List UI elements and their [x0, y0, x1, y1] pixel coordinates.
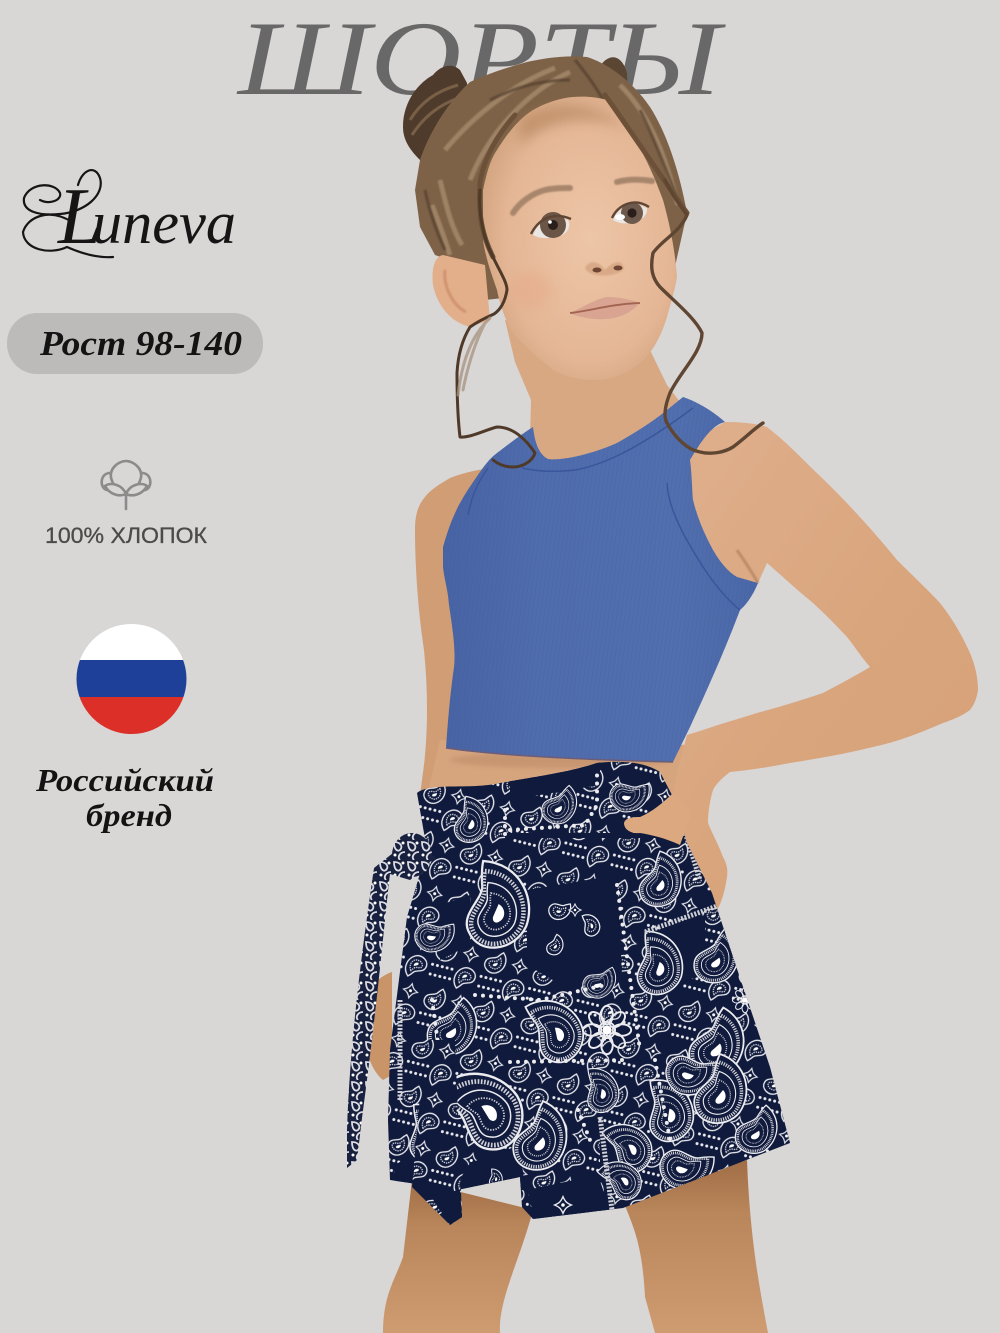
- left hand behind shorts: [364, 972, 392, 1080]
- legs: [383, 1160, 768, 1333]
- title: ШОРТЫ: ШОРТЫ: [236, 0, 727, 117]
- nose: [585, 262, 624, 276]
- ear: [432, 255, 490, 327]
- sash belt ties: [347, 833, 462, 1225]
- left eye: [531, 212, 571, 238]
- tank top: [443, 397, 758, 762]
- right curl: [652, 180, 763, 453]
- front hair strands: [480, 95, 687, 257]
- right arm and hand: [624, 422, 978, 910]
- eyebrows: [513, 180, 652, 213]
- icon: russian flag: [76, 624, 188, 735]
- small motifs: [548, 903, 572, 920]
- wispy strand: [458, 318, 490, 395]
- brand origin label: [35, 762, 214, 833]
- icon: cotton: [102, 461, 150, 509]
- left arm: [415, 468, 490, 800]
- waistband: [505, 833, 700, 838]
- dotted bandana bands: [432, 770, 670, 1140]
- thumb over shorts: [624, 793, 692, 845]
- paisley shorts: [380, 755, 800, 1225]
- brand origin label: бренд: [86, 797, 172, 833]
- height label: Рост 98-140: [39, 324, 242, 363]
- hair curls: [457, 95, 763, 467]
- brand logo: Luneva: uneva: [92, 190, 236, 256]
- dark navy patches: [395, 762, 705, 1220]
- model photo illustration: [347, 56, 978, 1333]
- brand logo: Luneva: L: [57, 173, 102, 261]
- right eye: [612, 202, 649, 224]
- hair back and buns: [403, 56, 687, 300]
- large paisleys: [466, 860, 530, 949]
- neck and midriff: [505, 320, 690, 480]
- face: [483, 97, 677, 380]
- brand origin label: Российский: [35, 762, 214, 798]
- height pill: [7, 313, 263, 374]
- mouth: [570, 297, 640, 319]
- brand logo: Luneva: [23, 170, 236, 261]
- material label: 100% ХЛОПОК: [45, 523, 207, 548]
- left curl: [457, 190, 535, 467]
